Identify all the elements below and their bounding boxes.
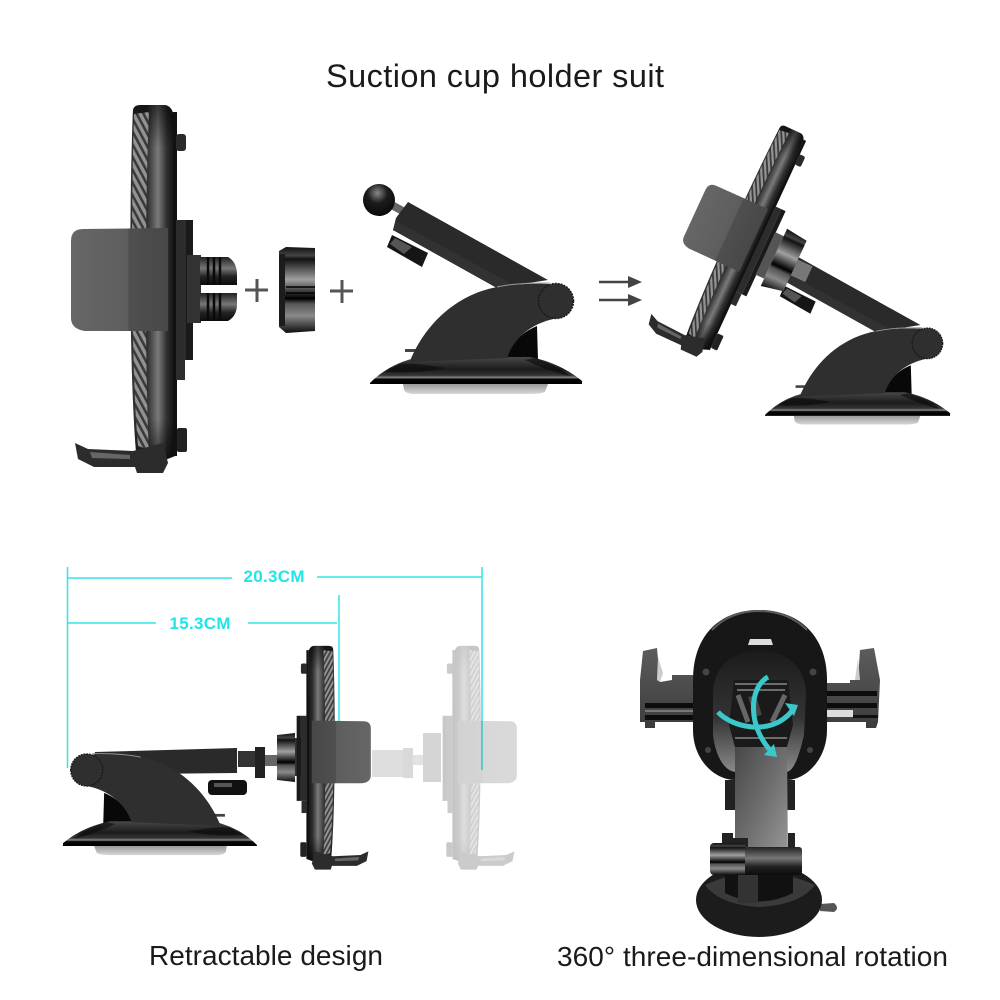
threaded stud — [187, 255, 237, 323]
retracted stand and holder — [63, 646, 371, 870]
ghost holder: extended position — [372, 646, 517, 870]
holder side view with threaded stud — [71, 105, 237, 473]
ball joint — [729, 680, 793, 747]
dimension: 15.3CM: 15.3CM — [170, 614, 230, 633]
suction base — [696, 863, 837, 937]
locking nut — [279, 247, 315, 333]
plus sign — [330, 280, 353, 303]
round housing — [693, 610, 827, 780]
dimension: 15.3CM — [67, 595, 339, 769]
side clamps — [640, 648, 880, 728]
title: Suction cup holder suit — [326, 58, 664, 94]
assembled holder on stand — [641, 107, 950, 425]
caption: 360 rotation: 360° three-dimensional rotation — [557, 941, 948, 972]
dimension: 20.3CM — [67, 567, 482, 770]
rotation arrows — [718, 677, 798, 757]
hinge — [710, 833, 802, 875]
plus sign — [245, 279, 268, 302]
suction stand with ball head — [363, 184, 582, 394]
front arm — [735, 747, 788, 860]
caption: retractable design: Retractable design — [149, 940, 383, 971]
assembly arrows — [599, 276, 642, 306]
front view of holder — [640, 610, 880, 937]
dimension: 20.3CM: 20.3CM — [244, 567, 304, 586]
rear legs — [725, 780, 795, 810]
